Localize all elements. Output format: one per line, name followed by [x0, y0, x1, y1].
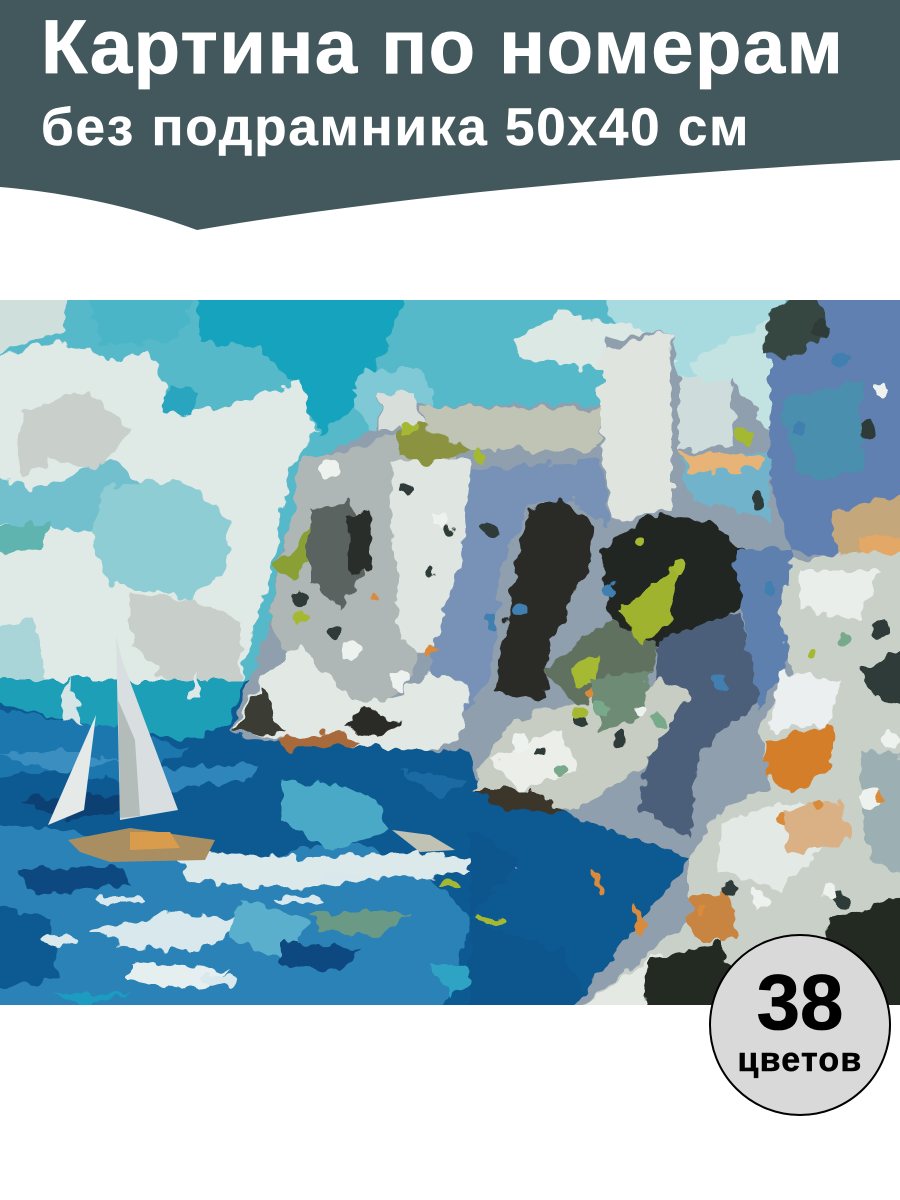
cliffs	[232, 280, 900, 1025]
header banner	[0, 0, 900, 230]
right foreground rocks	[582, 550, 900, 1005]
painting: seaside cliffs with sailboat	[0, 300, 900, 1005]
sea	[0, 675, 689, 1005]
brush strokes on cliffs	[292, 322, 900, 916]
distant sails	[60, 670, 202, 725]
cave arch	[495, 500, 596, 700]
mid cliff dark	[600, 515, 745, 645]
low rocks	[235, 645, 470, 750]
sea flecks	[438, 870, 647, 934]
sailboat	[48, 635, 455, 862]
badge label: цветов	[738, 1041, 862, 1079]
title: Картина по номерам	[41, 5, 844, 90]
badge number: 38	[757, 958, 843, 1046]
subtitle: без подрамника 50х40 см	[41, 98, 750, 157]
sky	[0, 300, 790, 685]
sea highlights	[40, 894, 324, 989]
badge: 38 colours	[709, 934, 891, 1116]
